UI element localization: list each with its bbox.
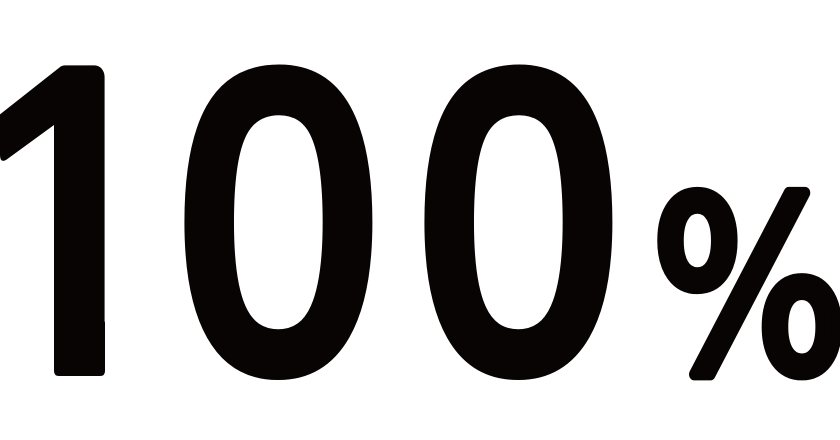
title: 100%: [0, 64, 840, 380]
